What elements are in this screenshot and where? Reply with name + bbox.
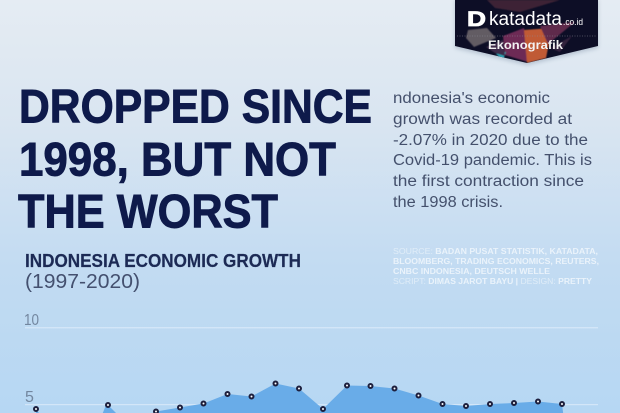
badge label: Ekonografik: Ekonografik <box>488 38 563 52</box>
logo wordmark: .co.id <box>563 17 583 27</box>
title: 1998, BUT NOT <box>19 134 336 187</box>
title: THE WORST <box>18 186 278 239</box>
logo badge <box>455 0 598 65</box>
source credits <box>393 247 599 286</box>
title: DROPPED SINCE <box>19 81 372 134</box>
intro paragraph: -2.07% in 2020 due to the <box>393 132 588 149</box>
title <box>18 81 372 239</box>
intro paragraph <box>393 90 592 211</box>
intro paragraph: ndonesia's economic <box>393 90 550 107</box>
source credits: SCRIPT: DIMAS JAROT BAYU | DESIGN: PRETTY <box>393 277 593 286</box>
intro paragraph: the 1998 crisis. <box>393 194 503 211</box>
area chart <box>24 312 598 413</box>
y axis label 10: 10 <box>24 312 39 329</box>
intro paragraph: the first contraction since <box>393 173 584 190</box>
chart heading: INDONESIA ECONOMIC GROWTH <box>25 250 301 271</box>
intro paragraph: Covid-19 pandemic. This is <box>393 152 592 169</box>
source credits: BLOOMBERG, TRADING ECONOMICS, REUTERS, <box>393 257 599 266</box>
source credits: CNBC INDONESIA, DEUTSCH WELLE <box>393 267 551 276</box>
chart heading <box>25 250 301 293</box>
logo wordmark: D <box>467 8 486 31</box>
intro paragraph: growth was recorded at <box>393 111 573 128</box>
logo wordmark: katadata <box>489 9 562 30</box>
data points <box>34 382 564 413</box>
chart heading: (1997-2020) <box>25 271 140 293</box>
source credits: SOURCE: BADAN PUSAT STATISTIK, KATADATA, <box>393 247 598 256</box>
logo dotted rule <box>457 35 596 37</box>
y axis label 5: 5 <box>25 389 34 406</box>
growth area <box>36 384 564 413</box>
logo wordmark <box>467 8 583 31</box>
